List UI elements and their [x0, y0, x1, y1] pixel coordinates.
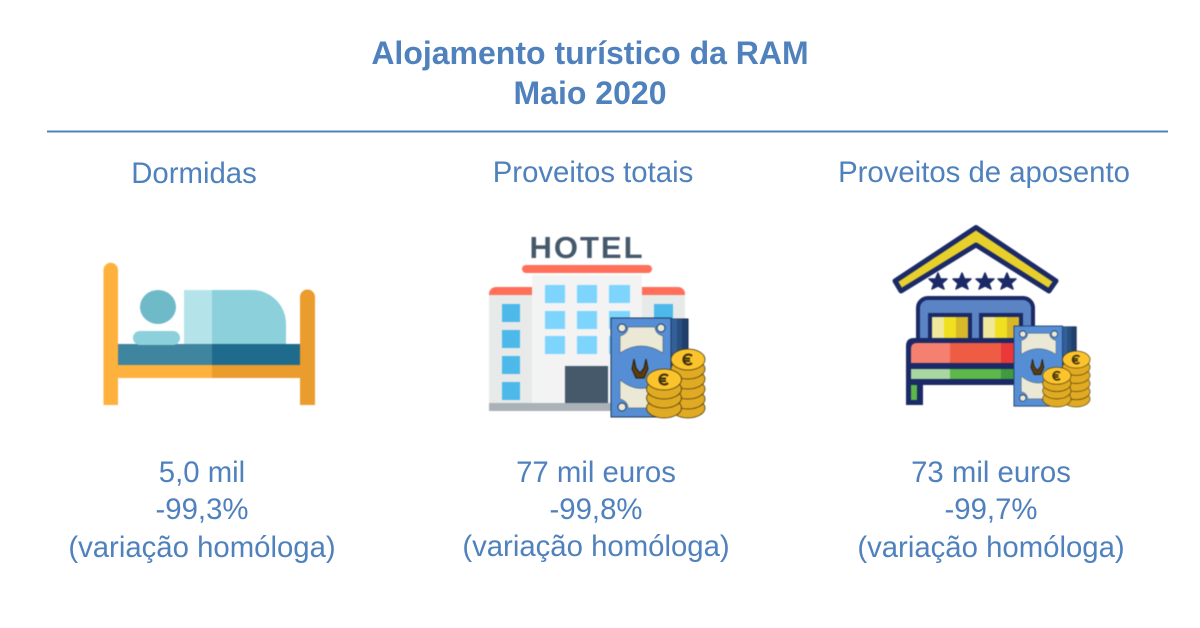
panel: proveitos totais — [462, 156, 730, 563]
panel: proveitos de aposento — [838, 156, 1130, 564]
values: proveitos de aposento: (variação homóloga) — [857, 531, 1125, 564]
title: Maio 2020 — [514, 75, 666, 111]
icon: hotel with money — [489, 230, 705, 418]
values: dormidas — [68, 456, 336, 564]
panel: dormidas — [68, 157, 336, 564]
title — [371, 35, 809, 111]
values: proveitos totais: 77 mil euros — [516, 456, 676, 489]
values: proveitos totais: -99,8% — [550, 493, 642, 526]
values: proveitos totais: (variação homóloga) — [462, 530, 730, 563]
heading: dormidas: Dormidas — [131, 157, 257, 190]
values: proveitos totais — [462, 456, 730, 563]
title: Alojamento turístico da RAM — [371, 35, 809, 71]
values: proveitos de aposento: 73 mil euros — [911, 456, 1071, 489]
values: proveitos de aposento: -99,7% — [945, 493, 1037, 526]
icon: bed with stars and money — [895, 228, 1090, 407]
values: proveitos de aposento — [857, 456, 1125, 564]
values: dormidas: 5,0 mil — [159, 456, 245, 489]
values: dormidas: -99,3% — [156, 493, 248, 526]
icon: hotel with money: HOTEL — [529, 230, 645, 265]
icon: bed — [104, 263, 315, 405]
heading: proveitos totais: Proveitos totais — [493, 156, 693, 189]
values: dormidas: (variação homóloga) — [68, 531, 336, 564]
heading: proveitos de aposento: Proveitos de aposento — [838, 156, 1130, 189]
